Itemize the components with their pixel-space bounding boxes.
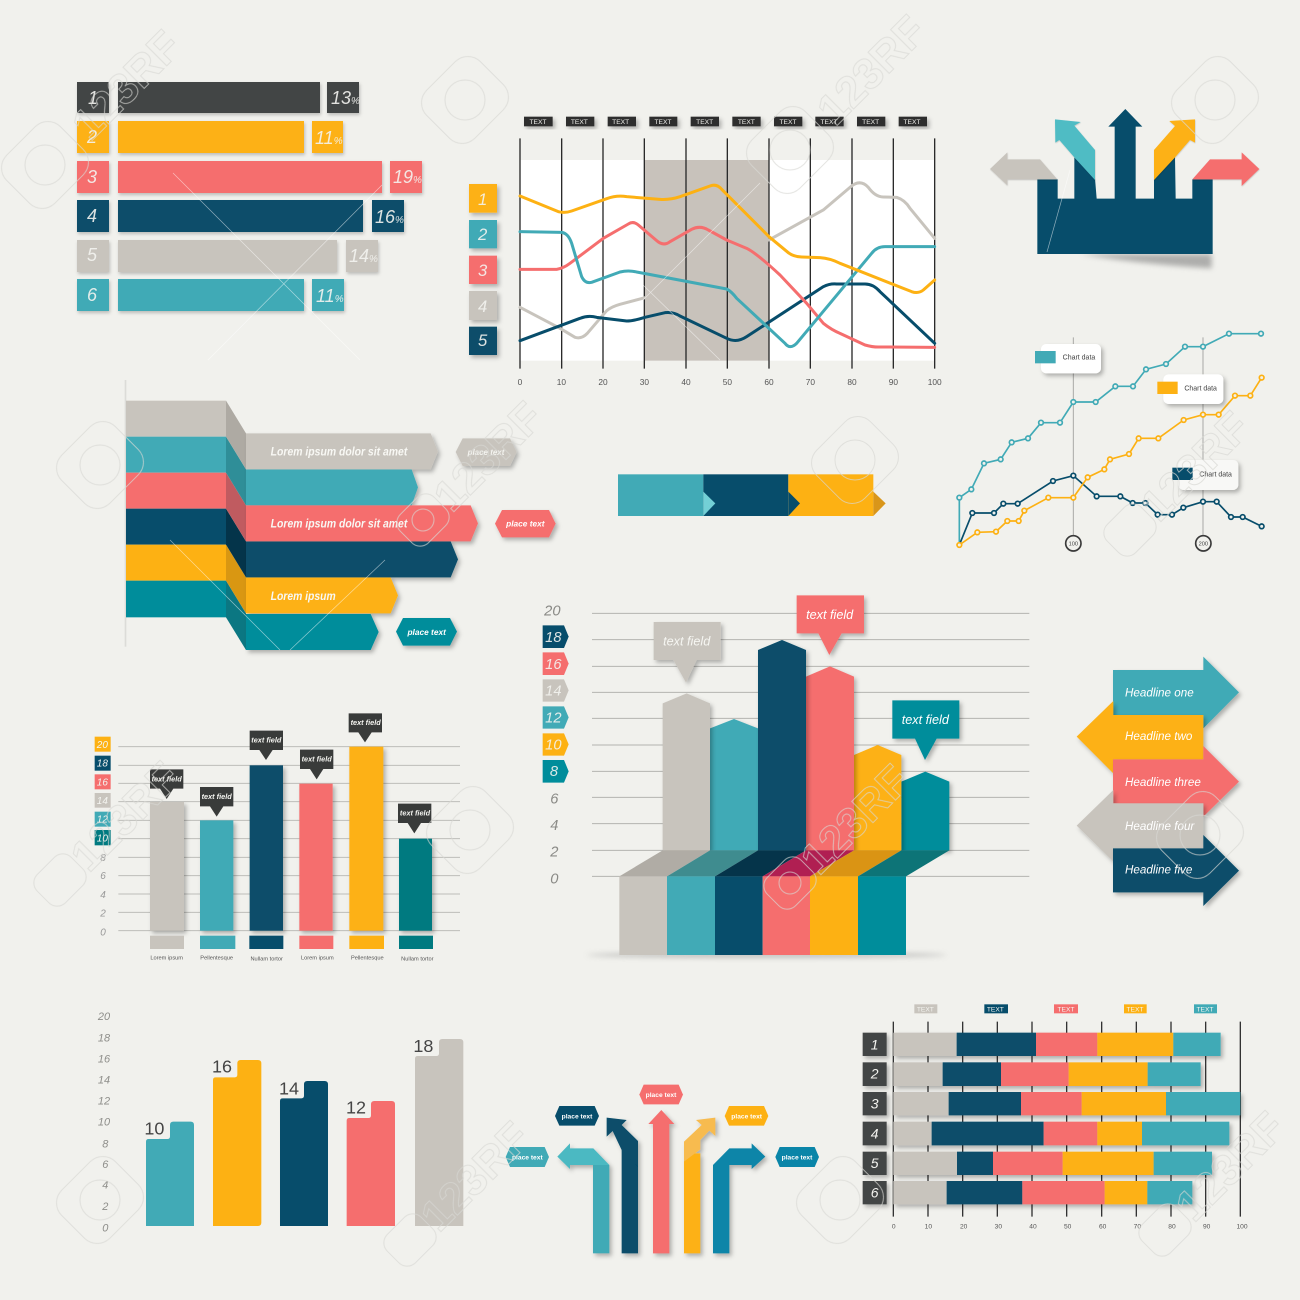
- vertical axis lines: [520, 138, 935, 369]
- callout: teal text field: [892, 700, 959, 760]
- base columns: [619, 876, 906, 955]
- x axis numbers: 0: [892, 1224, 896, 1231]
- panel: dotted multi-line chart: [957, 331, 1264, 551]
- x axis numbers: 70: [806, 377, 815, 387]
- callout captions: text field: [251, 736, 282, 745]
- row numbers and percentages: 13%: [331, 88, 360, 108]
- row 5: [77, 240, 378, 272]
- wall shadow line: [125, 380, 126, 647]
- teal segment: [618, 474, 703, 516]
- row numbers: 3: [871, 1095, 879, 1111]
- axis numbers: 10: [98, 1116, 111, 1128]
- white plot band: [520, 160, 935, 361]
- x axis numbers: 30: [995, 1224, 1002, 1231]
- x axis numbers: 30: [640, 377, 649, 387]
- value labels: 18: [413, 1036, 433, 1056]
- TEXT label captions: TEXT: [529, 119, 547, 126]
- axis marker 200: 200: [1199, 541, 1208, 547]
- TEXT label captions: TEXT: [862, 119, 879, 126]
- row numbers: 6: [871, 1184, 879, 1200]
- x axis numbers: 50: [1064, 1224, 1072, 1231]
- panel: stepped arrow column chart: [543, 595, 1029, 958]
- base strips: [150, 936, 433, 949]
- axis numbers: 18: [98, 1032, 111, 1044]
- tag: teal place text: [506, 1147, 549, 1167]
- callout captions: text field: [152, 775, 182, 784]
- callout: navy chart data: Chart data: [1199, 471, 1232, 478]
- axis marker 200: [1196, 536, 1211, 551]
- x axis numbers: 10: [557, 377, 566, 387]
- callout captions: text field: [351, 718, 381, 727]
- x axis numbers: 100: [928, 377, 942, 387]
- headline text: Headline two: [1125, 730, 1193, 743]
- legend numbers: 5: [478, 331, 488, 350]
- tag: grey place text: place text: [467, 448, 505, 457]
- ribbon captions: Lorem ipsum dolor sit amet: [271, 517, 408, 530]
- x axis numbers: 60: [764, 377, 774, 387]
- value labels: 12: [346, 1097, 366, 1117]
- TEXT label captions: TEXT: [779, 119, 797, 126]
- chevron notches: [703, 492, 886, 516]
- row 3: [77, 161, 422, 193]
- grey arrow: [990, 152, 1057, 185]
- callout: teal chart data: [1035, 344, 1101, 373]
- row 2: [77, 121, 343, 153]
- watermarks: 123RF: [1131, 403, 1259, 531]
- tag: grey place text: [456, 438, 517, 466]
- grey highlighted range: [645, 160, 769, 361]
- headline text: Headline five: [1125, 863, 1193, 876]
- axis numbers: [543, 604, 561, 887]
- legend captions: TEXT: [917, 1006, 934, 1013]
- horizontal grid: [592, 613, 1029, 876]
- column captions: [150, 955, 434, 962]
- yellow arrow: [1154, 119, 1195, 180]
- watermarks: 123RF: [808, 6, 936, 134]
- columns: [901, 772, 949, 850]
- x axis numbers: 60: [1099, 1224, 1107, 1231]
- row numbers and percentages: 5: [87, 245, 98, 265]
- row 3: [893, 1092, 1240, 1115]
- watermarks: 123RF: [63, 21, 191, 149]
- row numbers and percentages: 3: [87, 167, 97, 187]
- yellow arrow: [684, 1118, 715, 1253]
- row 1: [893, 1033, 1221, 1056]
- x axis numbers: 70: [1134, 1224, 1141, 1231]
- legend numbers: 1: [478, 190, 487, 209]
- row 1: [77, 82, 359, 113]
- legend numbers: 3: [478, 261, 488, 280]
- row numbers and percentages: 16%: [375, 207, 404, 227]
- shadow under block: [1080, 254, 1212, 268]
- callout: teal text field: text field: [902, 713, 950, 727]
- headline text: Headline four: [1125, 820, 1195, 833]
- tag: navy place text: place text: [562, 1113, 593, 1120]
- row numbers: 2: [870, 1066, 879, 1082]
- axis numbers: 8: [102, 1138, 109, 1150]
- navy arrow: [607, 1118, 638, 1253]
- legend numbers: [477, 190, 488, 350]
- watermarks: 123RF: [791, 756, 919, 884]
- panel: headline arrows: [1077, 657, 1239, 906]
- row numbers: [870, 1036, 879, 1200]
- x axis numbers: 0: [518, 377, 523, 387]
- teal arrow: [557, 1143, 609, 1253]
- axis numbers: 4: [102, 1180, 108, 1192]
- axis numbers: 14: [98, 1074, 110, 1086]
- column captions: Pellentesque: [351, 955, 384, 961]
- ribbon captions: [271, 445, 408, 603]
- panel: folded ribbon list: [125, 380, 556, 650]
- tag: coral place text: [639, 1085, 683, 1104]
- x axis numbers: 40: [681, 377, 691, 387]
- floor shadow: [587, 952, 947, 958]
- arrow four: [1077, 790, 1203, 862]
- TEXT label captions: [529, 119, 921, 126]
- watermarks: 123RF: [424, 393, 552, 521]
- arrow one: [1113, 657, 1239, 728]
- axis numbers on tags: [96, 740, 108, 844]
- axis numbers: 20: [97, 1011, 111, 1023]
- x axis numbers: 20: [960, 1224, 968, 1231]
- ribbon captions: Lorem ipsum: [271, 590, 336, 603]
- axis tag numbers: 8: [550, 764, 559, 780]
- axis numbers: 12: [98, 1096, 110, 1108]
- tag: coral place text: place text: [646, 1092, 677, 1099]
- legend captions: TEXT: [1126, 1006, 1144, 1013]
- plain axis numbers: 2: [99, 908, 106, 919]
- x axis numbers: [518, 377, 942, 387]
- row 6: [77, 279, 344, 311]
- callout: coral text field: text field: [806, 608, 854, 622]
- x axis numbers: 90: [1203, 1224, 1211, 1231]
- plain axis numbers: [99, 853, 106, 938]
- arrow three: [1113, 746, 1239, 817]
- row numbers: 4: [871, 1126, 879, 1142]
- legend captions: TEXT: [1057, 1006, 1075, 1013]
- row 6: [893, 1181, 1192, 1204]
- ribbon captions: Lorem ipsum dolor sit amet: [271, 445, 408, 458]
- tag: yellow place text: [725, 1106, 768, 1126]
- TEXT label captions: TEXT: [903, 119, 921, 126]
- TEXT label captions: TEXT: [820, 119, 838, 126]
- column 12: [347, 1101, 395, 1226]
- guide lines: [1073, 337, 1203, 535]
- diagonal folds: [619, 850, 949, 876]
- axis tag numbers: 18: [545, 630, 562, 646]
- row numbers and percentages: 14%: [349, 246, 378, 266]
- column captions: Lorem ipsum: [301, 955, 334, 961]
- axis numbers on tags: 16: [97, 777, 108, 788]
- axis tag numbers: 10: [545, 737, 562, 753]
- row numbers and percentages: [86, 88, 422, 306]
- x axis numbers: 10: [925, 1224, 932, 1231]
- row numbers and percentages: 4: [87, 206, 97, 226]
- tag: coral place text: place text: [505, 519, 546, 529]
- series lines: [520, 183, 935, 347]
- panel: three-step chevron bar: [618, 474, 886, 516]
- legend numbers: 4: [478, 297, 487, 316]
- TEXT label captions: TEXT: [738, 119, 755, 126]
- value labels: 14: [279, 1078, 299, 1098]
- panel: stacked horizontal bars: [863, 1004, 1248, 1231]
- TEXT label captions: TEXT: [654, 119, 672, 126]
- x axis numbers: 80: [847, 377, 857, 387]
- axis numbers on tags: 18: [97, 759, 108, 770]
- callout captions: text field: [400, 808, 431, 817]
- row numbers and percentages: 6: [87, 285, 98, 305]
- headline text: Headline three: [1125, 776, 1201, 789]
- arrow two: [1077, 701, 1203, 773]
- axis tag numbers: 16: [545, 657, 562, 673]
- axis numbers: 0: [550, 871, 559, 887]
- tag: teal place text: [396, 618, 457, 646]
- coloured axis tags: [543, 625, 569, 783]
- tag: coral place text: [495, 510, 556, 537]
- column captions: Lorem ipsum: [150, 955, 183, 961]
- row numbers and percentages: 2: [86, 127, 97, 147]
- panel: five bent arrows: [506, 1085, 819, 1253]
- tag: blue place text: [775, 1147, 819, 1167]
- callout: coral text field: [797, 595, 864, 655]
- navy block: [1037, 109, 1213, 254]
- blue arrow: [713, 1143, 765, 1253]
- callout: yellow chart data: Chart data: [1184, 385, 1217, 392]
- headline text: [1125, 687, 1201, 876]
- horizontal grid: [118, 747, 460, 931]
- x axis numbers: 100: [1236, 1224, 1248, 1231]
- row number tags: [863, 1033, 887, 1204]
- plain axis numbers: 0: [100, 927, 106, 938]
- plain axis numbers: 6: [100, 871, 106, 882]
- row 4: [77, 200, 404, 232]
- plain axis numbers: 8: [100, 853, 106, 864]
- dark callouts: [150, 713, 431, 833]
- callout captions: text field: [302, 754, 332, 763]
- x axis numbers: 40: [1029, 1224, 1037, 1231]
- folds: [226, 401, 246, 650]
- x axis numbers: 50: [723, 377, 732, 387]
- right ribbon tips: [246, 433, 478, 650]
- x axis numbers: [892, 1224, 1248, 1231]
- row numbers: 1: [871, 1036, 879, 1052]
- column captions: Nullam tortor: [250, 956, 283, 962]
- column 10: [146, 1122, 194, 1226]
- axis numbers on tags: 12: [97, 815, 108, 826]
- axis numbers on tags: 14: [97, 796, 108, 807]
- TEXT label captions: TEXT: [571, 119, 588, 126]
- callout captions: text field: [202, 792, 232, 801]
- row numbers: 5: [871, 1155, 879, 1171]
- thin white diagonal watermark lines: [170, 170, 1070, 650]
- column 16: [213, 1060, 261, 1226]
- callout: yellow chart data: [1157, 374, 1223, 404]
- axis tag numbers: [545, 630, 562, 780]
- callout: navy chart data: [1172, 460, 1238, 490]
- legend captions: TEXT: [987, 1006, 1004, 1013]
- axis numbers on tags: 10: [97, 833, 108, 844]
- axis tag numbers: 14: [545, 684, 561, 700]
- tag: navy place text: [555, 1106, 599, 1126]
- coral arrow: [648, 1110, 674, 1253]
- row 2: [893, 1062, 1201, 1086]
- axis numbers: 2: [101, 1201, 108, 1213]
- panel: multi-line chart: [469, 117, 942, 387]
- value labels: 10: [144, 1118, 164, 1138]
- panel: five-way arrows on navy block: [990, 109, 1259, 268]
- axis marker 100: 100: [1069, 541, 1078, 547]
- left bands: [126, 401, 226, 617]
- value labels: [144, 1036, 433, 1138]
- row 5: [893, 1152, 1212, 1175]
- legend squares: [469, 184, 497, 355]
- watermarks: 123RF: [411, 1113, 539, 1241]
- column captions: Nullam tortor: [401, 956, 434, 962]
- callout: teal chart data: Chart data: [1063, 355, 1095, 362]
- panel: horizontal percentage bars: [77, 82, 422, 311]
- navy series: [959, 473, 1264, 545]
- watermarks: 123RF: [1166, 1103, 1294, 1231]
- yellow series: [957, 375, 1264, 547]
- row 4: [893, 1122, 1229, 1145]
- TEXT label captions: TEXT: [696, 119, 713, 126]
- row numbers and percentages: 11%: [315, 128, 343, 148]
- legend numbers: 2: [477, 225, 488, 244]
- arrow five: [1113, 835, 1239, 906]
- x axis numbers: 90: [889, 377, 898, 387]
- legend tags: [914, 1004, 1217, 1013]
- callout captions: [152, 718, 431, 817]
- row numbers and percentages: 19%: [393, 167, 422, 187]
- axis tags: [95, 737, 111, 845]
- axis numbers: 0: [102, 1222, 109, 1234]
- x axis numbers: 20: [598, 377, 608, 387]
- axis numbers: 6: [102, 1159, 109, 1171]
- teal arrow: [1055, 119, 1095, 180]
- row numbers and percentages: 11%: [316, 286, 344, 306]
- panel: notched rounded column chart: [97, 1011, 463, 1234]
- row numbers and percentages: 1: [88, 88, 98, 108]
- yellow segment: [788, 474, 873, 516]
- top TEXT labels: [524, 117, 927, 126]
- column 18: [415, 1039, 463, 1226]
- tag: teal place text: place text: [512, 1154, 543, 1161]
- axis numbers: 4: [550, 818, 558, 834]
- x axis numbers: 80: [1168, 1224, 1176, 1231]
- tag: teal place text: place text: [406, 627, 447, 637]
- watermarks: 123RF: [61, 753, 189, 881]
- legend captions: TEXT: [1196, 1006, 1214, 1013]
- coral arrow: [1192, 152, 1259, 186]
- plain axis numbers: 4: [100, 890, 106, 901]
- axis marker 100: [1066, 536, 1081, 551]
- callout: grey text field: text field: [663, 634, 711, 648]
- axis numbers on tags: 20: [96, 740, 108, 751]
- headline text: Headline one: [1125, 687, 1194, 700]
- navy segment: [703, 474, 788, 516]
- value labels: 16: [212, 1057, 232, 1077]
- tag: blue place text: place text: [782, 1154, 813, 1161]
- column 14: [280, 1081, 328, 1226]
- legend captions: [917, 1006, 1214, 1013]
- callout: grey text field: [654, 622, 721, 683]
- column captions: Pellentesque: [200, 955, 233, 961]
- axis numbers: 2: [549, 845, 558, 861]
- axis numbers: 6: [550, 791, 559, 807]
- tag: yellow place text: place text: [731, 1113, 763, 1120]
- TEXT label captions: TEXT: [612, 119, 629, 126]
- vertical grid: [893, 1022, 1240, 1217]
- teal series: [957, 331, 1263, 545]
- axis tag numbers: 12: [545, 711, 561, 727]
- axis numbers: 20: [543, 604, 561, 620]
- columns: [150, 747, 432, 931]
- axis numbers: [97, 1011, 111, 1234]
- axis numbers: 16: [98, 1054, 111, 1066]
- panel: simple column chart with dark callouts: [95, 713, 460, 962]
